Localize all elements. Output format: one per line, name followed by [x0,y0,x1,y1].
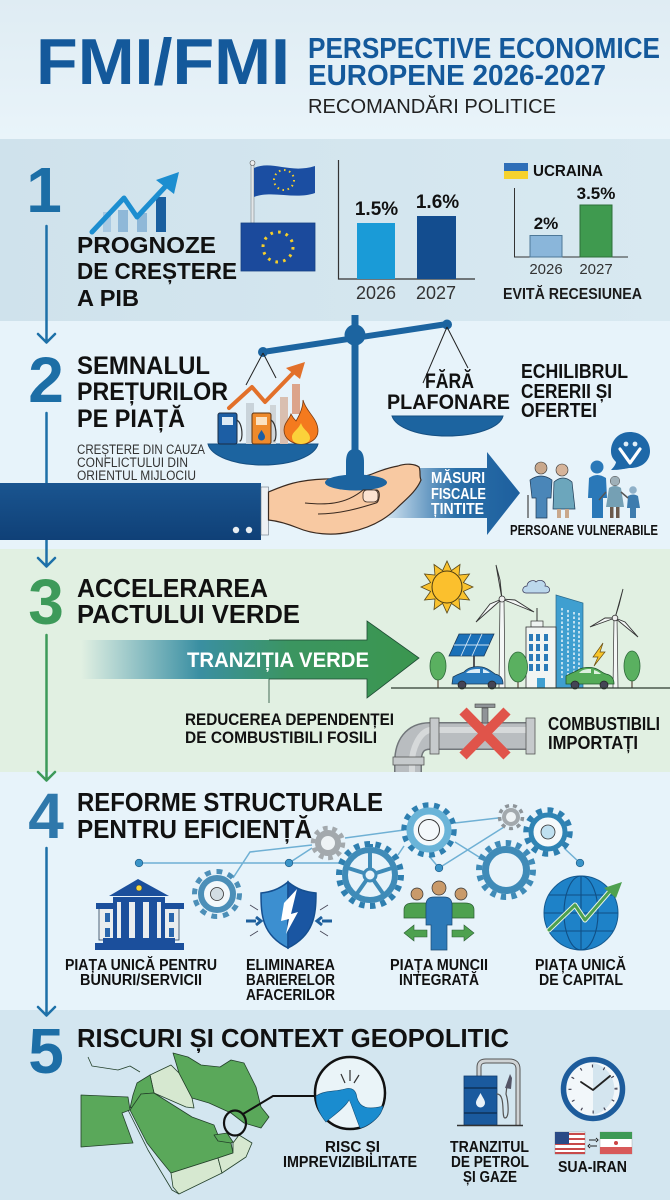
label: no price cap [387,370,510,414]
bar 2027 [417,216,456,279]
arrow: green transition [81,621,419,703]
text: reduce fossil dependency: REDUCEREA DEPENDENȚEI [185,710,394,729]
timeline arrow 2 to 3 [38,413,55,566]
label: single market goods services: PIAȚA UNICĂ PENTRU [65,955,217,974]
bar 2026 [357,223,395,279]
arrow: targeted fiscal measures: ȚINTITE [431,501,484,518]
title header [36,25,660,118]
number 3: 3 [28,566,64,638]
icon: rising prices, fuel pumps and flame [218,362,318,444]
panel 3: green deal acceleration [0,549,670,780]
bar chart: EU growth: 1.5% [355,199,398,220]
label: oil and gas transit: ȘI GAZE [463,1169,517,1186]
bar chart: EU growth: 2027 [416,283,456,303]
heading: risks and geopolitics: RISCURI ȘI CONTEXT GEOPOLITIC [77,1023,509,1053]
callout: Strait of Hormuz lens [224,1057,385,1136]
arrow: targeted fiscal measures [378,452,520,535]
number 4: 4 [28,780,64,852]
heading: price signal: PREȚURILOR [77,378,228,406]
label: risk and unpredictability: RISC ȘI [325,1139,380,1156]
wind turbine left [476,565,534,688]
heading: accelerate green deal: PACTULUI VERDE [77,599,300,629]
bar chart: Ukraine growth: 2% [534,214,558,233]
heading: structural reforms: PENTRU EFICIENȚĂ [77,814,312,844]
bar chart: EU growth [338,160,475,303]
timeline arrow 3 to 4 [38,635,55,780]
icon: balance scale [208,315,503,475]
bar chart: Ukraine growth [503,163,642,303]
gear small grey [313,828,343,858]
icon: green city [391,561,670,689]
panel 5: risks and geopolitical context [0,1010,670,1200]
gear top centre [404,805,454,855]
text: reduce fossil dependency: DE COMBUSTIBILI FOSILI [185,728,377,747]
label: imported fuels: IMPORTAȚI [548,732,638,753]
label: single market goods services [65,955,217,989]
label: removing business barriers: ELIMINAREA [246,957,335,974]
tree left [430,652,446,688]
timeline arrow 4 to 5 [38,848,55,1016]
number 2: 2 [28,344,64,416]
icon: bank [95,879,184,950]
text: rise due to conflict: CREȘTERE DIN CAUZA [77,442,205,457]
label: oil and gas transit [450,1139,529,1186]
bar chart: Ukraine growth: 2027 [579,261,613,278]
icon: EU flags [241,160,315,271]
bar chart: Ukraine growth: 2026 [529,261,563,278]
heading: price signal: SEMNALUL [77,352,210,380]
left pan [208,444,318,465]
solar panel [449,634,494,672]
icon: Ukraine flag [504,163,528,179]
label: oil and gas transit: DE PETROL [451,1154,529,1171]
label: removing business barriers: BARIERELOR [246,972,335,989]
label: USA-Iran: SUA-IRAN [558,1159,627,1176]
right pan [392,416,503,436]
text: reduce fossil dependency [185,710,394,747]
gear top right [526,810,570,854]
label: imported fuels [548,713,660,753]
label: risk and unpredictability [283,1139,417,1171]
icon: speech bubble with caring hands [611,432,650,470]
icon: blocked pipe [393,704,535,772]
label: capital single market [535,955,626,989]
label: capital single market: PIAȚA UNICĂ [535,955,626,974]
caption: avoids recession: EVITĂ RECESIUNEA [503,286,642,303]
map: Middle East [81,1053,269,1194]
panel 1: PIB growth forecasts [0,139,670,342]
white office building [526,608,556,688]
timeline arrow 1 to 2 [38,226,55,342]
arrow: green transition: TRANZIȚIA VERDE [187,649,369,672]
icon: sleeve and supporting hand [0,464,421,540]
heading: price signal: PE PIAȚĂ [77,404,185,433]
label: supply demand balance: CERERII ȘI [521,381,612,403]
label: removing business barriers [246,957,335,1004]
electric car green [566,667,614,689]
icon: vulnerable people group [528,432,650,518]
label: supply demand balance [521,361,628,422]
heading: structural reforms [77,787,383,844]
tree right [624,651,640,688]
icon: clock [564,1060,622,1118]
elderly couple [528,462,575,518]
icon: lightning [593,643,605,666]
text: rise due to conflict [77,442,205,483]
arrow: targeted fiscal measures: MĂSURI [431,470,485,487]
wind turbine right [590,589,638,688]
bar chart: Ukraine growth: UCRAINA [533,163,603,180]
heading: GDP forecast: A PIB [77,285,139,311]
tree middle [508,652,528,688]
label: removing business barriers: AFACERILOR [246,987,335,1004]
icon: oil barrel and pipeline [457,1061,523,1126]
label: no price cap: FĂRĂ [425,370,474,393]
gear right [479,843,533,897]
bar chart: EU growth: 2026 [356,283,396,303]
label: supply demand balance: OFERTEI [521,400,597,422]
text: rise due to conflict: ORIENTUL MIJLOCIU [77,468,196,483]
icon: globe with rising arrow [544,876,622,950]
heading: accelerate green deal: ACCELERAREA [77,573,268,603]
icon: growth chart [92,172,179,232]
number 5: 5 [28,1015,64,1087]
heading: structural reforms: REFORME STRUCTURALE [77,787,383,817]
label: supply demand balance: ECHILIBRUL [521,361,628,383]
subtitle line 3: RECOMANDĂRI POLITICE [308,95,556,118]
heading: GDP forecast [77,232,237,311]
panel 4: structural reforms [0,772,670,1016]
label: integrated labour market [390,957,488,989]
gear large spoked [339,844,401,906]
heading: price signal [77,352,228,433]
label: capital single market: DE CAPITAL [539,972,623,989]
family [588,460,640,518]
connecting network lines and nodes [135,818,584,878]
label: oil and gas transit: TRANZITUL [450,1139,529,1156]
label: risk and unpredictability: IMPREVIZIBILITATE [283,1154,417,1171]
arrow: targeted fiscal measures: FISCALE [431,486,486,503]
bar chart: Ukraine growth: 3.5% [577,184,615,203]
title: FMI/FMI: FMI/FMI [36,25,290,98]
icon: gears [194,805,570,916]
electric car blue [452,667,503,689]
icon: red cross [463,711,507,756]
icon: integrated labour market [404,881,474,950]
icon: cracked shield [246,882,332,948]
tall blue building [556,595,583,688]
text: rise due to conflict: CONFLICTULUI DIN [77,455,188,470]
subtitle line 2: EUROPENE 2026-2027 [308,60,606,92]
panel 2: market price signal [0,315,670,566]
label: integrated labour market: PIAȚA MUNCII [390,957,488,974]
icon: sun [421,561,473,613]
gear small top right [500,806,522,828]
heading: GDP forecast: PROGNOZE [77,232,216,258]
label: no price cap: PLAFONARE [387,391,510,414]
label: single market goods services: BUNURI/SERVICII [80,972,202,989]
number 1: 1 [26,154,62,226]
heading: accelerate green deal [77,573,300,629]
icon: USA and Iran flags [555,1132,632,1154]
heading: GDP forecast: DE CREȘTERE [77,258,237,285]
icon: cloud [523,580,550,593]
bar chart: EU growth: 1.6% [416,192,459,213]
gear lower left [194,872,240,916]
label: integrated labour market: INTEGRATĂ [399,970,479,989]
